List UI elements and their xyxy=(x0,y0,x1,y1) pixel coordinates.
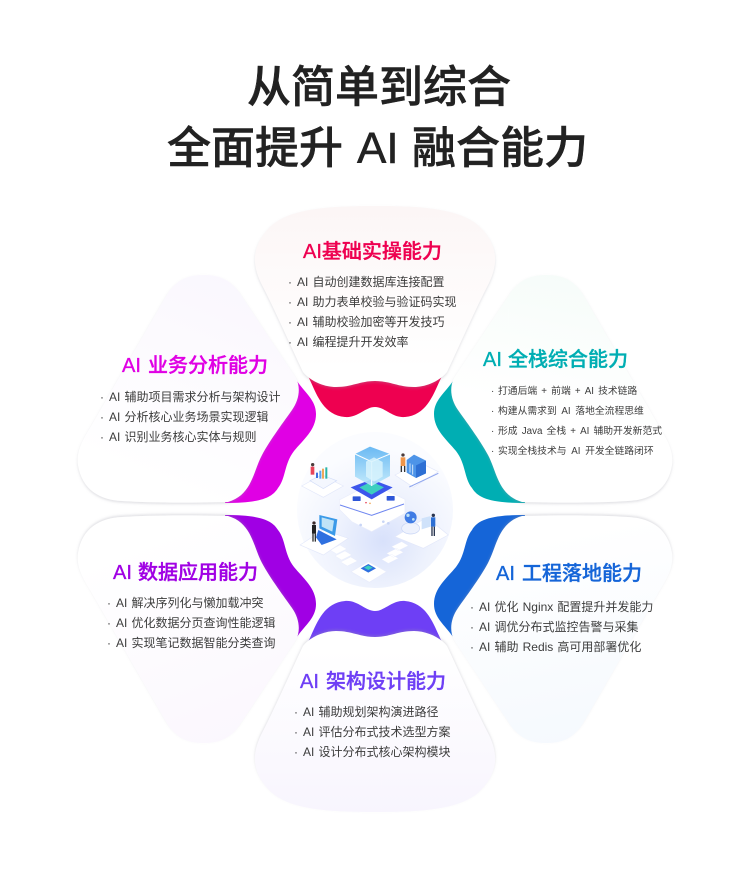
heading: 业务分析能力 xyxy=(148,354,268,377)
heading: AI xyxy=(113,562,132,584)
list: AI 优化 Nginx 配置提升并发能力 xyxy=(479,599,653,614)
list: · xyxy=(491,406,494,417)
heading: AI xyxy=(496,563,515,585)
list xyxy=(294,704,450,759)
panel shape xyxy=(451,515,672,743)
tab: blue wave xyxy=(434,515,525,637)
list: AI 分析核心业务场景实现逻辑 xyxy=(109,409,268,424)
list: AI 调优分布式监控告警与采集 xyxy=(479,619,638,634)
list: AI 辅助规划架构演进路径 xyxy=(303,704,438,719)
panel shape xyxy=(255,206,495,387)
panel: AI 数据应用能力 xyxy=(78,515,316,743)
icon: stairs xyxy=(330,542,408,566)
panel: AI 基础实操能力 xyxy=(255,206,495,417)
icon: top left platform with chart xyxy=(302,463,343,497)
list: AI 设计分布式核心架构模块 xyxy=(303,744,450,759)
list: · xyxy=(294,745,298,759)
list: · xyxy=(288,315,292,329)
title: 从简单到综合 xyxy=(247,63,511,112)
list: AI 助力表单校验与验证码实现 xyxy=(297,294,456,309)
list: AI 编程提升开发效率 xyxy=(297,334,408,349)
heading: AI xyxy=(300,671,319,693)
list: · xyxy=(470,640,474,654)
list: 形成 Java 全栈 + AI 辅助开发新范式 xyxy=(498,424,662,437)
list: · xyxy=(107,616,111,630)
panel shape xyxy=(78,275,299,503)
icon: central platform xyxy=(339,479,405,532)
heading: 数据应用能力 xyxy=(138,561,258,584)
panel shape xyxy=(255,631,495,812)
list: · xyxy=(491,386,494,397)
panel shape xyxy=(78,515,299,743)
list: AI 辅助校验加密等开发技巧 xyxy=(297,314,444,329)
list: · xyxy=(288,335,292,349)
list: · xyxy=(294,725,298,739)
title: 融合能力 xyxy=(412,124,588,173)
heading: 全栈综合能力 xyxy=(508,348,628,371)
list: · xyxy=(470,600,474,614)
list: AI 优化数据分页查询性能逻辑 xyxy=(116,615,275,630)
tab: red wave xyxy=(308,370,442,417)
tab: purple wave xyxy=(225,515,316,637)
list: · xyxy=(100,410,104,424)
icon: bottom chip tile xyxy=(351,562,387,582)
panel: AI 工程落地能力 xyxy=(434,515,672,743)
panel shape xyxy=(451,275,672,503)
list: · xyxy=(294,705,298,719)
list: · xyxy=(491,446,494,457)
list: AI 自动创建数据库连接配置 xyxy=(297,274,444,289)
list: AI 实现笔记数据智能分类查询 xyxy=(116,635,275,650)
list xyxy=(107,595,275,650)
tab: teal wave xyxy=(434,381,525,503)
list: 打通后端 + 前端 + AI 技术链路 xyxy=(498,384,637,397)
list: · xyxy=(107,636,111,650)
icon: top right platform with building xyxy=(395,453,438,487)
list xyxy=(288,274,456,349)
tab: magenta wave xyxy=(225,381,316,503)
central illustration xyxy=(297,432,453,588)
panel: AI 业务分析能力 xyxy=(78,275,316,503)
list: · xyxy=(100,430,104,444)
title: AI xyxy=(357,124,399,173)
panel: AI 全栈综合能力 xyxy=(434,275,672,503)
panel: AI 架构设计能力 xyxy=(255,601,495,812)
heading: AI xyxy=(122,355,141,377)
icon: bottom left platform with monitor xyxy=(300,515,348,555)
list: AI 识别业务核心实体与规则 xyxy=(109,429,256,444)
icon: data cube xyxy=(355,447,390,486)
list: AI 解决序列化与懒加载冲突 xyxy=(116,595,263,610)
list: AI 评估分布式技术选型方案 xyxy=(303,724,450,739)
icon: bottom right platform with server and person xyxy=(395,511,448,548)
list: · xyxy=(470,620,474,634)
tab: violet wave xyxy=(308,601,442,648)
list: AI 辅助项目需求分析与架构设计 xyxy=(109,389,280,404)
list xyxy=(491,384,662,457)
list: · xyxy=(100,390,104,404)
title: 全面提升 xyxy=(167,124,343,173)
list xyxy=(100,389,280,444)
list: · xyxy=(107,596,111,610)
title xyxy=(167,63,588,173)
heading: AI基础实操能力 xyxy=(303,240,442,263)
list: · xyxy=(491,426,494,437)
heading: 架构设计能力 xyxy=(326,670,446,693)
list xyxy=(470,599,653,654)
heading: 工程落地能力 xyxy=(522,562,642,585)
list: · xyxy=(288,275,292,289)
list: 实现全栈技术与 AI 开发全链路闭环 xyxy=(498,444,654,457)
list: · xyxy=(288,295,292,309)
list: 构建从需求到 AI 落地全流程思维 xyxy=(498,404,644,417)
heading: AI xyxy=(483,349,502,371)
list: AI 辅助 Redis 高可用部署优化 xyxy=(479,639,641,654)
